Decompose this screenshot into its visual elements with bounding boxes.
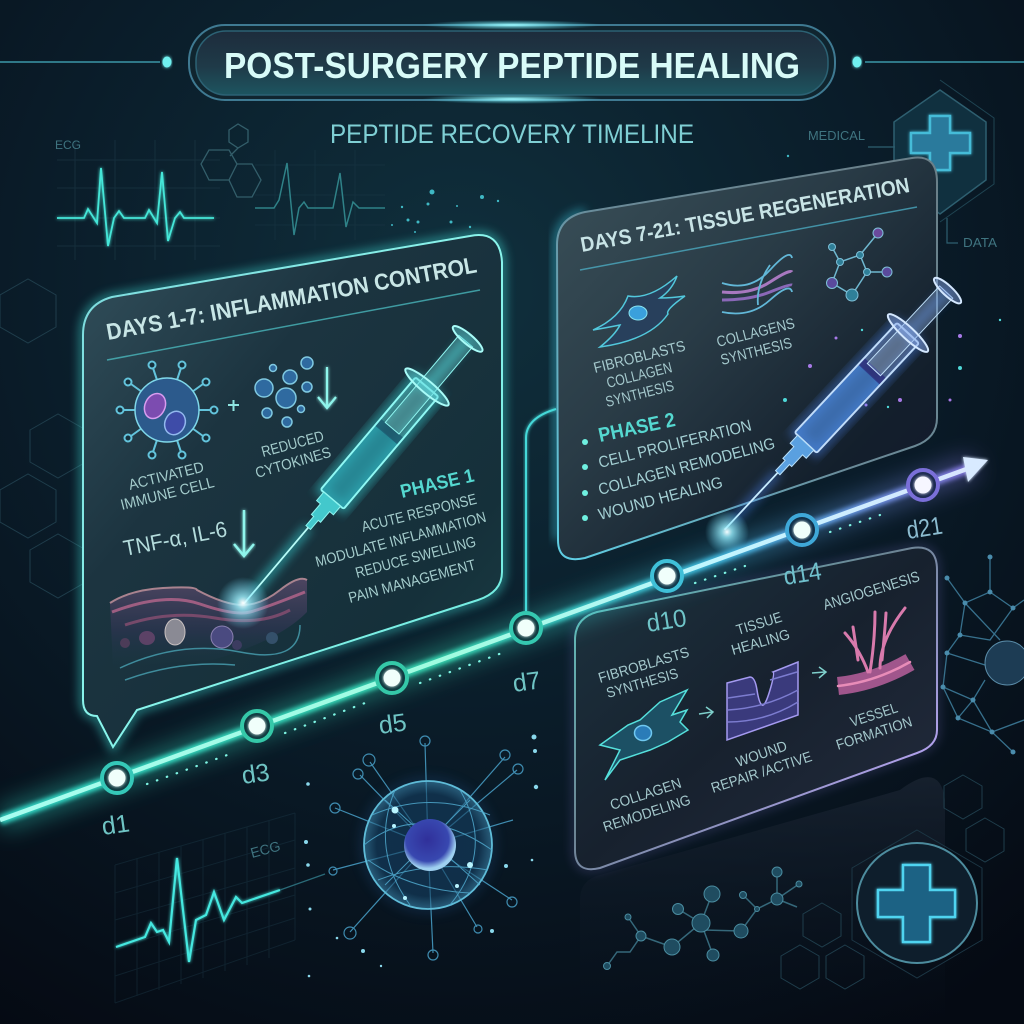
label: activated immune cell: IMMUNE CELL bbox=[119, 474, 216, 514]
icon: fibroblast bbox=[593, 276, 685, 347]
milestone: d1: d1 bbox=[100, 809, 131, 841]
particles around neural cell bbox=[304, 734, 538, 977]
ECG trace bottom left bbox=[116, 858, 280, 962]
label: fibroblasts synthesis bbox=[597, 645, 691, 702]
small labels: ECG, medical, data: MEDICAL bbox=[808, 128, 865, 143]
label: wound repair: REPAIR /ACTIVE bbox=[709, 749, 814, 797]
icon: molecule bbox=[826, 228, 892, 301]
label: tissue healing: TISSUE bbox=[734, 610, 784, 639]
arrow: tnf down bbox=[234, 510, 254, 556]
label: activated immune cell: ACTIVATED bbox=[127, 459, 206, 494]
icon: neural cell bottom center bbox=[329, 736, 523, 960]
label: vessel formation: FORMATION bbox=[834, 714, 914, 754]
label: tissue healing: HEALING bbox=[730, 627, 792, 659]
milestone: d14: d14 bbox=[782, 557, 824, 591]
icon: syringe phase 1 bbox=[222, 317, 492, 622]
panel: bottom right collagen and angiogenesis bbox=[575, 547, 937, 869]
ECG trace top left bbox=[57, 168, 214, 246]
ECG trace top center bbox=[255, 163, 385, 235]
milestone: d7: d7 bbox=[511, 666, 542, 698]
plus sign bbox=[228, 400, 239, 411]
icon: cytokines bbox=[255, 357, 313, 427]
arrow bbox=[699, 707, 713, 718]
text: phase 1: REDUCE SWELLING bbox=[354, 533, 478, 582]
particles in panel 2 bbox=[783, 319, 1001, 408]
injection glow bbox=[217, 577, 269, 629]
text: phase 2: PHASE 2 bbox=[596, 409, 677, 447]
text: phase 2: WOUND HEALING bbox=[597, 474, 725, 524]
label: fibroblasts collagen synthesis: SYNTHESIS bbox=[604, 377, 676, 411]
particle dots top bbox=[391, 155, 789, 233]
icon: medical cross top right bbox=[868, 80, 994, 243]
icon: syringe phase 2 bbox=[705, 269, 971, 548]
milestone: d3: d3 bbox=[240, 758, 271, 790]
milestone: d14 bbox=[782, 515, 824, 591]
heading: days 7-21: DAYS 7-21: TISSUE REGENERATION bbox=[579, 174, 911, 257]
label: fibroblasts synthesis: FIBROBLASTS bbox=[597, 645, 691, 687]
small labels: ECG, medical, data: ECG bbox=[249, 838, 282, 861]
label: collagen remodeling: REMODELING bbox=[601, 792, 693, 836]
panel: days 1-7 inflammation control bbox=[83, 235, 502, 747]
icon: wound tissue bbox=[727, 662, 798, 740]
icon: network cell right bbox=[940, 554, 1024, 754]
small labels: ECG, medical, data: DATA bbox=[963, 235, 997, 250]
timeline arrow bbox=[0, 457, 988, 841]
ECG fading tail bbox=[280, 874, 325, 890]
arrow bbox=[812, 667, 826, 678]
banner side connector lines bbox=[0, 56, 1024, 68]
icon: collagen bbox=[722, 255, 792, 314]
panel: days 7-21 tissue regeneration bbox=[557, 158, 1001, 559]
heading divider bbox=[580, 207, 917, 270]
label: angiogenesis: ANGIOGENESIS bbox=[821, 568, 922, 614]
text: phase 1: PHASE 1 bbox=[398, 465, 477, 503]
icon: fibroblast bottom bbox=[600, 690, 688, 780]
milestone: d21: d21 bbox=[905, 512, 944, 545]
label: fibroblasts synthesis: SYNTHESIS bbox=[605, 666, 680, 702]
milestone: d1 bbox=[100, 763, 132, 841]
milestone: d5: d5 bbox=[377, 708, 408, 740]
heading divider bbox=[107, 290, 480, 360]
skin tissue bbox=[110, 579, 307, 680]
molecule chain bottom bbox=[604, 867, 802, 970]
text: phase 2: COLLAGEN REMODELING bbox=[597, 435, 777, 499]
label: fibroblasts collagen synthesis: COLLAGEN bbox=[605, 359, 674, 392]
icon: medical cross bottom right bbox=[852, 830, 982, 978]
milestone: d10: d10 bbox=[645, 604, 688, 638]
injection glow 2 bbox=[705, 510, 749, 554]
dotted particle trails bbox=[147, 515, 880, 784]
text: phase 1: MODULATE INFLAMMATION bbox=[314, 509, 488, 571]
milestone: d5 bbox=[377, 663, 408, 740]
label: tnf: TNF-α, IL-6 bbox=[121, 516, 229, 561]
connector: d7 to phase 2 bbox=[526, 409, 556, 628]
milestone: d10 bbox=[645, 561, 688, 638]
milestone: d21 bbox=[905, 470, 944, 545]
text: phase 1: ACUTE RESPONSE bbox=[360, 491, 478, 536]
label: tissue healing bbox=[730, 610, 792, 659]
small labels: ECG, medical, data: ECG bbox=[55, 138, 81, 152]
text: phase 2: CELL PROLIFERATION bbox=[597, 417, 753, 472]
text: phase 1: PAIN MANAGEMENT bbox=[347, 557, 478, 607]
icon: vessels bbox=[838, 608, 910, 686]
label: fibroblasts collagen synthesis: FIBROBLASTS bbox=[592, 338, 687, 377]
molecule top center bbox=[201, 124, 261, 197]
subtitle: PEPTIDE RECOVERY TIMELINE bbox=[330, 119, 694, 149]
text: phase 1 bbox=[314, 465, 488, 607]
icon: activated immune cell bbox=[116, 362, 218, 458]
text: phase 2 bbox=[582, 409, 777, 524]
heading: days 1-7: DAYS 1-7: INFLAMMATION CONTROL bbox=[104, 251, 479, 345]
label: reduced cytokines: REDUCED bbox=[260, 428, 326, 461]
label: collagen remodeling: COLLAGEN bbox=[608, 776, 684, 814]
label: fibroblasts collagen synthesis bbox=[592, 338, 687, 411]
label: reduced cytokines bbox=[253, 428, 333, 482]
label: collagens synthesis: COLLAGENS bbox=[715, 315, 797, 351]
title banner bbox=[189, 20, 835, 104]
milestone: d3 bbox=[240, 711, 272, 790]
label: wound repair: WOUND bbox=[734, 738, 789, 771]
arrow: cytokines down bbox=[318, 367, 336, 408]
label: vessel formation: VESSEL bbox=[848, 700, 900, 731]
label: reduced cytokines: CYTOKINES bbox=[253, 444, 333, 482]
small labels: ECG, medical, data bbox=[55, 128, 997, 861]
label: collagens synthesis bbox=[715, 315, 797, 369]
label: collagens synthesis: SYNTHESIS bbox=[719, 335, 794, 369]
milestone: d7 bbox=[511, 613, 542, 698]
title text: POST-SURGERY PEPTIDE HEALING bbox=[224, 45, 800, 86]
reflection below lower panel bbox=[580, 777, 945, 1024]
